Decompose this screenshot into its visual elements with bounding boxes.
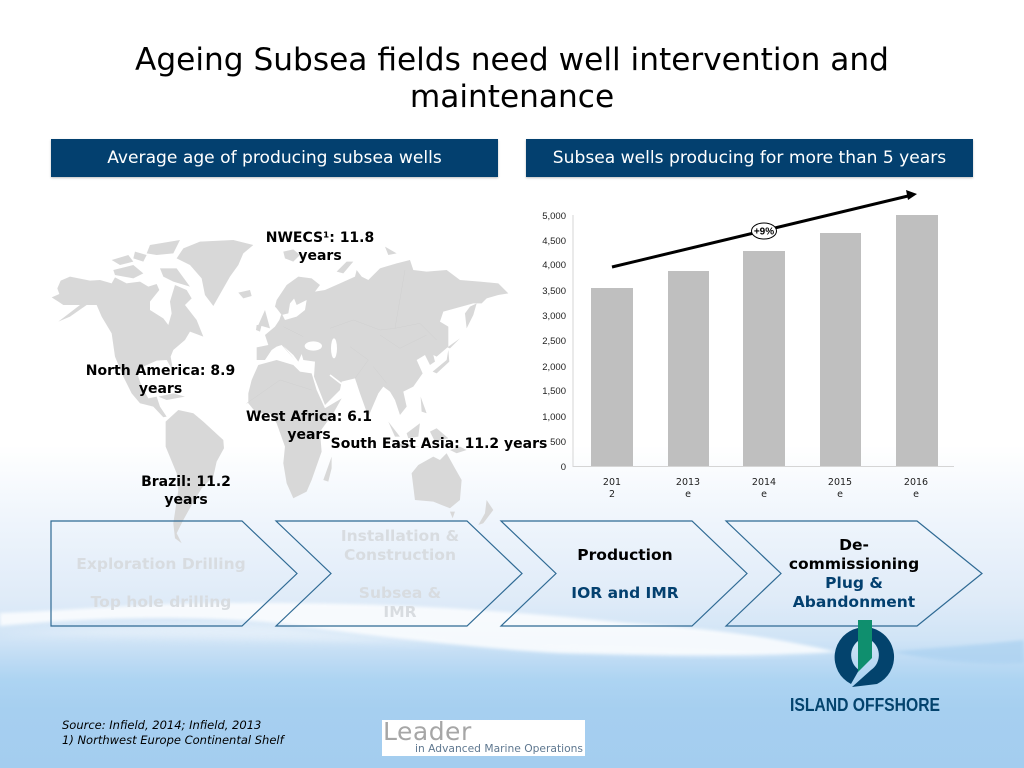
bar chart: 3,000 bbox=[542, 311, 566, 322]
bar chart: e bbox=[913, 489, 919, 500]
label: West Africa: West Africa: 6.1 years bbox=[246, 409, 372, 443]
growth badge: +9% bbox=[754, 226, 774, 238]
leader banner: Leader bbox=[383, 717, 472, 746]
label: NWECS: NWECS¹: 11.8 years bbox=[266, 230, 374, 264]
label: South East Asia: South East Asia: 11.2 years bbox=[331, 436, 547, 452]
chevron 3 text: Production IOR and IMR bbox=[571, 546, 679, 602]
logo: Island Offshore: ISLAND OFFSHORE bbox=[790, 694, 940, 715]
leader banner: in Advanced Marine Operations bbox=[415, 742, 583, 755]
growth badge bbox=[752, 223, 776, 239]
header: wells producing: Subsea wells producing for more than 5 years bbox=[553, 148, 946, 168]
bar chart: 1,500 bbox=[542, 386, 566, 397]
bar chart: 4,000 bbox=[542, 260, 566, 271]
header: wells producing bbox=[526, 139, 973, 177]
header: average age: Average age of producing subsea wells bbox=[107, 148, 442, 168]
bar chart: 2014 bbox=[752, 477, 776, 488]
bar chart: e bbox=[685, 489, 691, 500]
label: North America: North America: 8.9 years bbox=[86, 363, 235, 397]
bar chart: 2 bbox=[609, 489, 615, 500]
bar chart: 201 bbox=[603, 477, 621, 488]
bar chart: 2,000 bbox=[542, 362, 566, 373]
label: Brazil: Brazil: 11.2 years bbox=[141, 474, 231, 508]
title: Ageing Subsea fields need well intervention and maintenance bbox=[135, 42, 889, 115]
bar chart: 4,500 bbox=[542, 236, 566, 247]
growth arrow bbox=[612, 190, 917, 267]
bar chart: 2016 bbox=[904, 477, 928, 488]
bar chart: 500 bbox=[550, 437, 566, 448]
bar chart: 3,500 bbox=[542, 286, 566, 297]
chevron 4 text: De- commissioning Plug & Abandonment bbox=[789, 536, 919, 611]
header: average age bbox=[51, 139, 498, 177]
bar chart: 2013 bbox=[676, 477, 700, 488]
bar chart: 2,500 bbox=[542, 336, 566, 347]
chevron 1 text: Exploration Drilling Top hole drilling bbox=[76, 555, 246, 611]
bar chart: e bbox=[837, 489, 843, 500]
bar chart: 5,000 bbox=[542, 211, 566, 222]
chevron 2 text: Installation & Construction Subsea & IMR bbox=[341, 527, 459, 621]
bar chart: 0 bbox=[561, 462, 566, 473]
bar chart: 1,000 bbox=[542, 412, 566, 423]
source note: Source: Infield, 2014; Infield, 2013 1) Northwest Europe Continental Shelf bbox=[62, 718, 284, 747]
bar chart: 2015 bbox=[828, 477, 852, 488]
leader banner bbox=[382, 720, 585, 756]
bar chart: e bbox=[761, 489, 767, 500]
